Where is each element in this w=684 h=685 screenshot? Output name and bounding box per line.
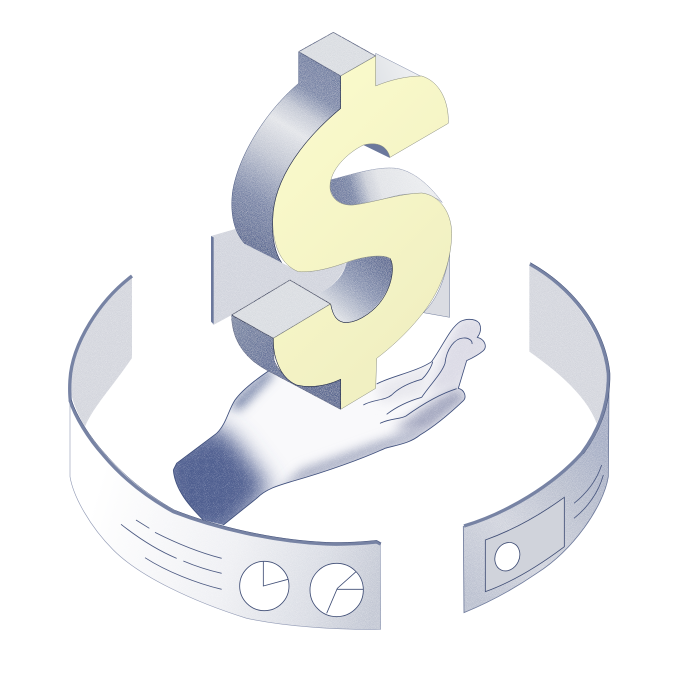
ring right: card circle	[490, 538, 524, 575]
dollar: upper notch	[363, 143, 390, 158]
pie chart: second	[310, 563, 363, 617]
ring: left back section	[69, 276, 132, 427]
plate: right part	[423, 253, 450, 317]
dollar: upper side outline	[232, 52, 299, 244]
dollar: dark edges	[272, 76, 392, 409]
plate: left part	[211, 229, 347, 325]
ring left: top edge upper	[70, 276, 132, 402]
dollar: lower block top face	[232, 280, 331, 338]
ring right: card panel	[485, 497, 564, 592]
ring: left front band	[70, 400, 381, 629]
ring right: text lines	[574, 465, 603, 518]
dollar: middle inner band	[330, 168, 442, 205]
ring left: outer face	[70, 400, 381, 629]
ring left: text lines	[121, 520, 222, 589]
plate: left edge	[211, 236, 214, 324]
dollar: lower hole side	[317, 256, 393, 323]
dollar: yellow front face	[273, 56, 452, 409]
dollar: top block top face	[299, 32, 376, 76]
ring right: top edge dark line	[530, 263, 610, 454]
ring left: outer edge	[70, 400, 381, 629]
ring left: top edge band	[70, 400, 381, 544]
hand: outline	[173, 319, 485, 525]
ring right: inner back panel	[529, 263, 608, 423]
hand: airbrushed shading	[153, 317, 490, 540]
pie chart: first	[240, 561, 289, 611]
dollar: top right wedge	[376, 53, 422, 86]
ring left: top edge dark line	[71, 400, 381, 543]
ring right: top edge band	[464, 264, 608, 526]
hand holding the dollar	[172, 318, 486, 526]
hand: finger lines	[363, 338, 472, 423]
hand: palm and fingers	[173, 319, 485, 525]
ring right: outer face	[463, 383, 609, 613]
dollar sign	[232, 32, 452, 409]
ring right: front edge line	[463, 383, 609, 613]
dollar: lower block side face	[232, 315, 341, 409]
ring: right section	[463, 263, 610, 613]
illustration: dollar sign on a hand inside a ring	[68, 32, 610, 630]
ring left: inner back panel	[69, 276, 132, 427]
dollar: upper side face	[232, 52, 341, 263]
background plate behind the dollar	[211, 229, 450, 325]
